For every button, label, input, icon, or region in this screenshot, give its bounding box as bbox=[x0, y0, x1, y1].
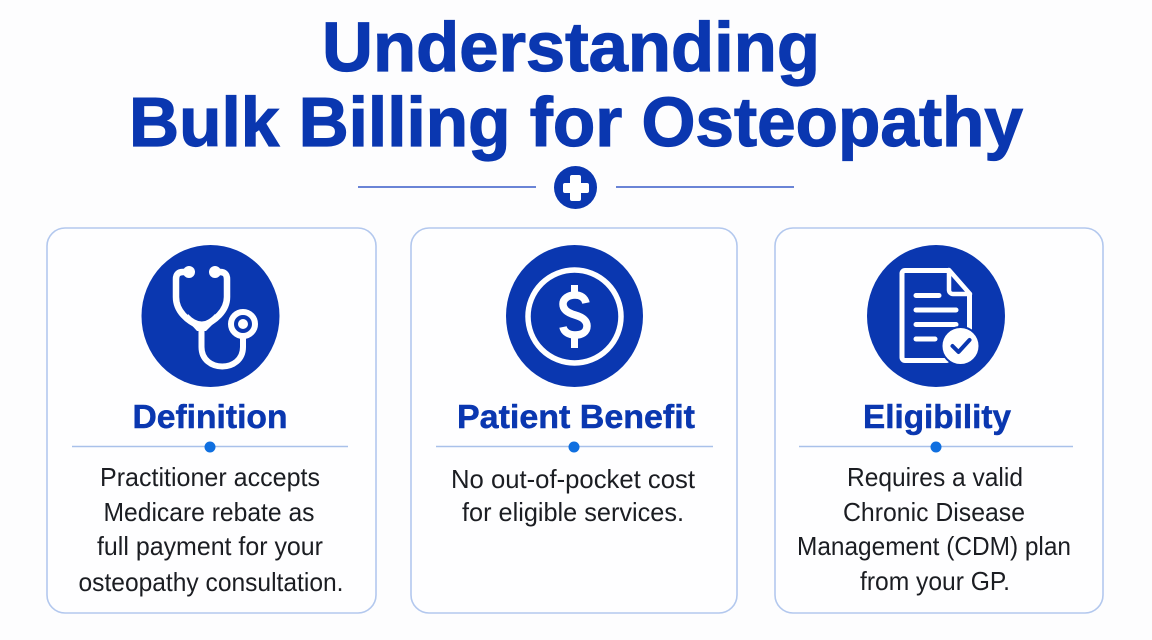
text: eligibility: from your GP. bbox=[860, 566, 1010, 596]
icon: stethoscope bbox=[142, 245, 280, 387]
heading: definition: Definition bbox=[132, 398, 288, 435]
text: definition: osteopathy consultation. bbox=[78, 567, 344, 597]
text: definition: Medicare rebate as bbox=[104, 497, 314, 527]
divider: eligibility bbox=[799, 442, 1073, 452]
text: patient benefit: for eligible services. bbox=[462, 497, 684, 527]
title: Understanding bbox=[322, 8, 820, 86]
heading: eligibility: Eligibility bbox=[863, 398, 1012, 435]
icon: dollar coin bbox=[506, 245, 643, 387]
icon: document with check bbox=[867, 245, 1005, 387]
title divider with plus icon bbox=[358, 166, 794, 209]
divider: definition bbox=[72, 442, 348, 452]
panel: definition bbox=[47, 228, 376, 613]
title bbox=[129, 8, 1023, 161]
text: definition: Practitioner accepts bbox=[100, 462, 320, 492]
text: definition: full payment for your bbox=[97, 531, 323, 561]
text: eligibility: Requires a valid bbox=[847, 462, 1023, 492]
text: definition bbox=[78, 462, 344, 597]
title: Bulk Billing for Osteopathy bbox=[129, 83, 1023, 161]
heading: patient benefit: Patient Benefit bbox=[457, 398, 695, 435]
text: patient benefit: No out-of-pocket cost bbox=[451, 464, 696, 494]
panel: eligibility bbox=[775, 228, 1103, 613]
divider: patient benefit bbox=[436, 442, 713, 452]
text: eligibility: Management (CDM) plan bbox=[797, 531, 1071, 561]
text: eligibility: Chronic Disease bbox=[843, 497, 1025, 527]
panel: patient benefit bbox=[411, 228, 737, 613]
text: eligibility bbox=[797, 462, 1071, 596]
text: patient benefit bbox=[451, 464, 696, 527]
